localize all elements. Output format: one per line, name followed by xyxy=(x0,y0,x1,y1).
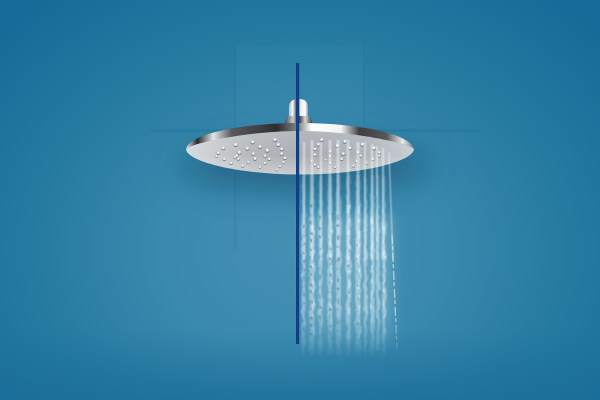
water spray xyxy=(303,140,397,360)
shadow of shower head on wall xyxy=(180,142,430,190)
vertical divider line xyxy=(296,63,299,344)
neck xyxy=(289,99,308,116)
wall tile joints xyxy=(150,45,480,250)
smooth upper jets xyxy=(304,140,393,260)
nozzles xyxy=(215,138,381,171)
shower head xyxy=(186,99,414,174)
dark speckles in the water xyxy=(304,205,358,340)
turbulent jets xyxy=(304,175,384,360)
bright highlights xyxy=(313,205,384,340)
base mist xyxy=(303,215,393,355)
outer fine jet xyxy=(392,235,397,350)
face plate xyxy=(186,131,414,174)
collar xyxy=(285,116,312,123)
chrome rim xyxy=(186,123,414,149)
